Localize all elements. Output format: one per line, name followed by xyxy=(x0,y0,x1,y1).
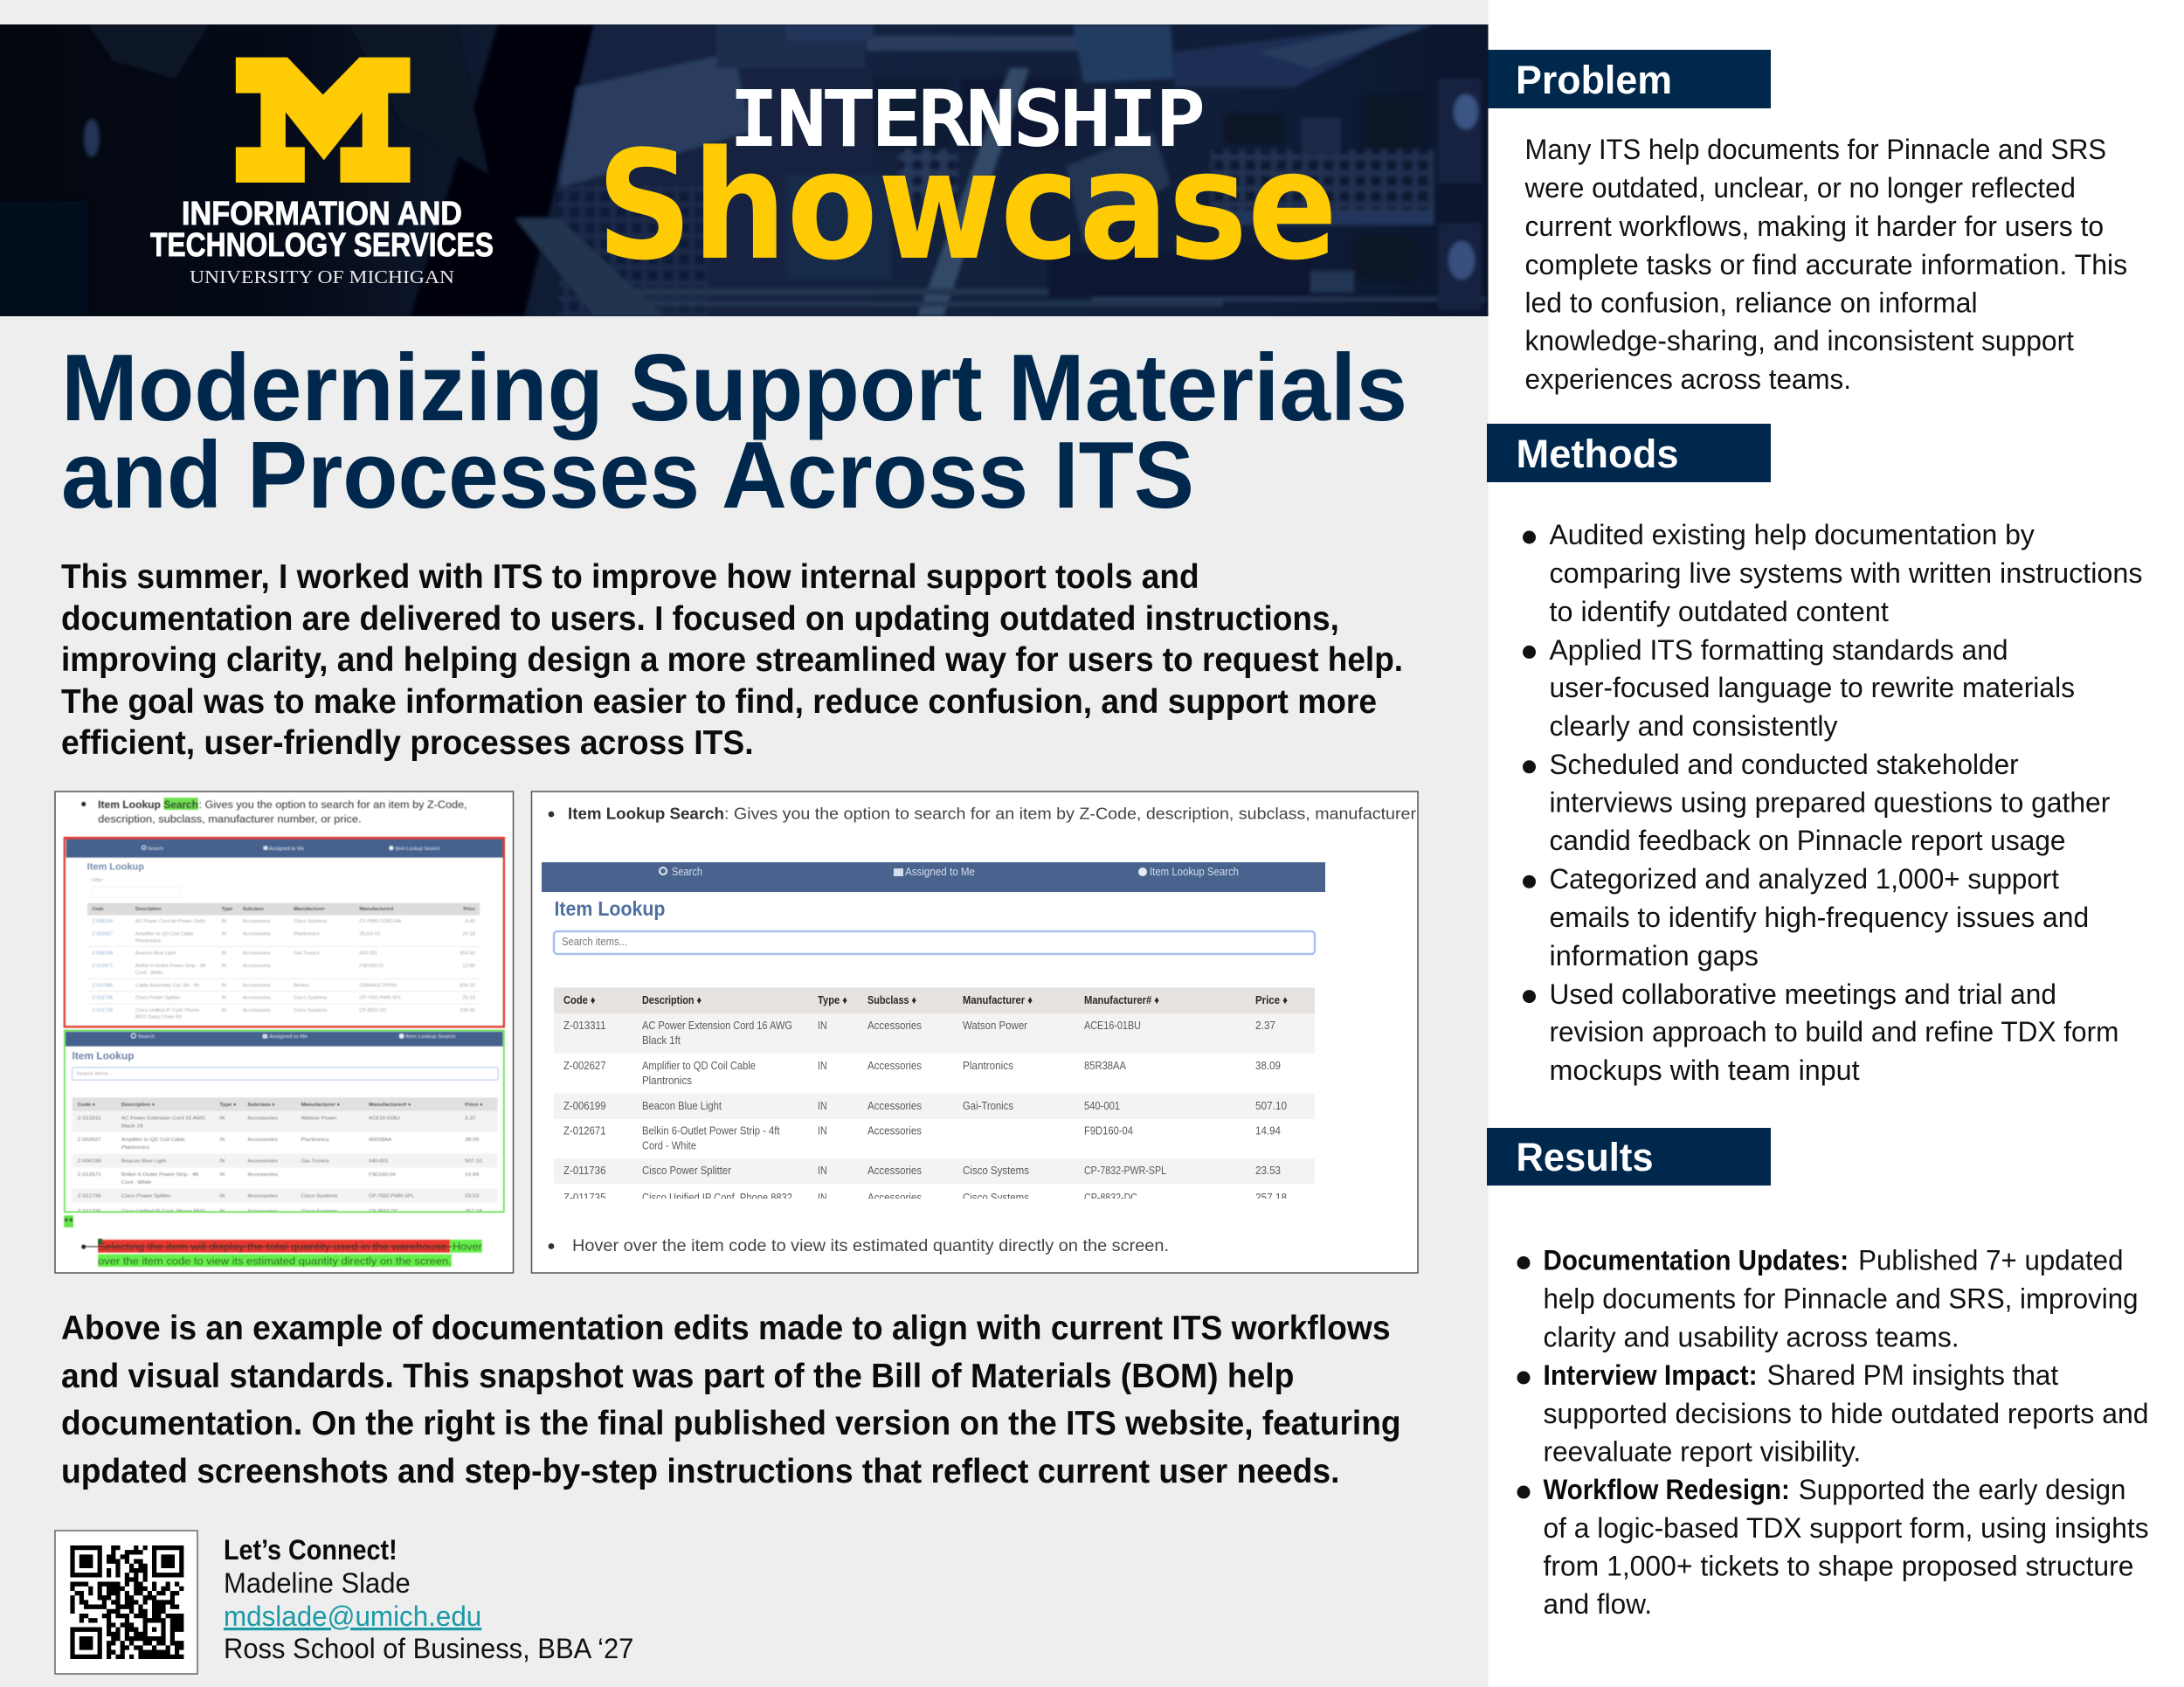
methods list: clearly and consistently xyxy=(1550,710,1837,742)
old table screenshot in red box: IN xyxy=(222,919,226,924)
contact details: Let’s Connect! xyxy=(224,1534,397,1566)
item table: IN xyxy=(818,1059,827,1072)
new table screenshot in green box: IN xyxy=(219,1193,225,1200)
new table screenshot in green box: Search items... xyxy=(76,1072,113,1077)
item table: IN xyxy=(818,1191,827,1204)
new table screenshot in green box: Z-002627 xyxy=(78,1137,101,1143)
results list: Interview Impact: xyxy=(1543,1359,1758,1391)
icon: block M logo xyxy=(236,58,411,183)
results list: Published 7+ updated xyxy=(1858,1245,2123,1276)
old table screenshot in red box: Description xyxy=(135,907,162,912)
title xyxy=(61,335,1407,529)
tracked-change bullet: Hover xyxy=(453,1241,482,1253)
old table screenshot in red box: Z-012671 xyxy=(92,964,113,969)
new table screenshot in green box: Item Lookup xyxy=(72,1049,135,1062)
old table screenshot in red box: AC Power Cord for Power Outle xyxy=(135,919,205,924)
old table screenshot in red box: Cord - White xyxy=(135,971,163,976)
contact details xyxy=(224,1534,633,1664)
item table: Z-011735 xyxy=(563,1191,606,1204)
old table screenshot in red box: Accessories xyxy=(243,1008,271,1013)
contact details: Madeline Slade xyxy=(224,1567,411,1599)
contact details: mdslade@umich.edu xyxy=(224,1601,481,1632)
old table screenshot in red box: Cisco Power Splitter xyxy=(135,996,181,1001)
item table: 507.10 xyxy=(1255,1099,1287,1112)
navigation bar: Search xyxy=(672,865,702,878)
methods list: Categorized and analyzed 1,000+ support xyxy=(1550,863,2059,895)
results list: help documents for Pinnacle and SRS, improving xyxy=(1543,1283,2139,1315)
item table: Cisco Power Splitter xyxy=(642,1164,732,1177)
problem text: experiences across teams. xyxy=(1524,363,1851,395)
caption paragraph xyxy=(61,1310,1401,1490)
new table screenshot in green box: Code ♦ xyxy=(78,1103,95,1108)
old table screenshot in red box: Z-006199 xyxy=(92,951,113,957)
old table screenshot in red box: Subclass xyxy=(243,907,264,912)
item table: IN xyxy=(818,1164,827,1177)
new table screenshot in green box: Cisco Power Splitter xyxy=(121,1193,171,1200)
item table: Accessories xyxy=(867,1099,922,1112)
new table screenshot in green box: Accessories xyxy=(248,1158,278,1165)
old table screenshot in red box: CP-7832-PWR-SPL xyxy=(359,996,401,1001)
item table: Code ♦ xyxy=(563,993,596,1006)
tracked-change bullet: Selecting the item will display the total quantity used in the warehouse. xyxy=(98,1241,450,1253)
results list: reevaluate report visibility. xyxy=(1543,1436,1861,1468)
item table: AC Power Extension Cord 16 AWG xyxy=(642,1019,792,1032)
published intro bullet: Item Lookup Search xyxy=(568,804,724,823)
old table screenshot in red box: Belden xyxy=(294,983,309,988)
results list xyxy=(1517,1245,2149,1620)
new table screenshot in green box: Z-011736 xyxy=(78,1193,101,1200)
search box: Search items... xyxy=(562,935,627,948)
item table xyxy=(542,987,1415,1206)
new table screenshot in green box: IN xyxy=(219,1137,225,1143)
intro paragraph: documentation are delivered to users. I focused on updating outdated instructions, xyxy=(61,600,1339,638)
new table screenshot in green box: IN xyxy=(219,1158,225,1165)
item table: Price ♦ xyxy=(1255,993,1288,1006)
new table screenshot in green box: Accessories xyxy=(248,1193,278,1200)
old table screenshot in red box: Accessories xyxy=(243,996,271,1001)
old table screenshot in red box: Cable Assembly Cat. 6A - 4ft xyxy=(135,983,199,988)
item table: 85R38AA xyxy=(1084,1059,1126,1072)
item table: 14.94 xyxy=(1255,1124,1281,1137)
old table screenshot in red box: Cisco Systems xyxy=(294,919,328,924)
new table screenshot in green box: Beacon Blue Light xyxy=(121,1158,166,1165)
heading: Results: Results xyxy=(1517,1135,1653,1179)
results list: Documentation Updates: xyxy=(1543,1245,1849,1276)
new table screenshot in green box: 540-001 xyxy=(369,1158,389,1165)
old table screenshot in red box: 24.18 xyxy=(462,931,475,937)
methods list: comparing live systems with written instructions xyxy=(1550,557,2143,589)
contact details: Ross School of Business, BBA ‘27 xyxy=(224,1633,633,1664)
old table screenshot in red box: Manufacturer xyxy=(294,907,325,912)
results list: supported decisions to hide outdated reports and xyxy=(1543,1398,2149,1429)
item table: Z-011736 xyxy=(563,1164,606,1177)
old table screenshot in red box: 509.35 xyxy=(460,983,475,988)
logo wordmark xyxy=(150,196,494,287)
heading: Methods xyxy=(1487,424,1771,482)
methods list: Audited existing help documentation by xyxy=(1550,519,2035,550)
results list: from 1,000+ tickets to shape proposed structure xyxy=(1543,1551,2134,1581)
old table screenshot in red box: 540-001 xyxy=(359,951,377,957)
intro paragraph: efficient, user-friendly processes across ITS. xyxy=(61,724,754,762)
item table: F9D160-04 xyxy=(1084,1124,1133,1137)
problem text: led to confusion, reliance on informal xyxy=(1524,287,1978,318)
new table screenshot in green box: F9D160-04 xyxy=(369,1172,397,1178)
results list: and flow. xyxy=(1543,1588,1652,1620)
caption paragraph: and visual standards. This snapshot was part of the Bill of Materials (BOM) help xyxy=(61,1358,1294,1395)
methods list: revision approach to build and refine TDX form xyxy=(1550,1016,2118,1047)
old table screenshot in red box: Manufacturer# xyxy=(359,907,394,912)
problem text: complete tasks or find accurate information. This xyxy=(1524,249,2127,280)
draft intro bullet: Search xyxy=(163,799,198,811)
old table screenshot in red box: Z-017586 xyxy=(92,983,113,988)
old table screenshot in red box: IN xyxy=(222,983,226,988)
problem text: current workflows, making it harder for users to xyxy=(1524,211,2104,242)
item table: 38.09 xyxy=(1255,1059,1281,1072)
item table: Cord - White xyxy=(642,1139,696,1151)
methods list: Applied ITS formatting standards and xyxy=(1550,634,2008,666)
banner title: Showcase: Showcase xyxy=(597,118,1337,294)
results list: Workflow Redesign: xyxy=(1543,1474,1790,1505)
old table screenshot in red box: Cisco Unified IP Conf. Phone xyxy=(135,1008,199,1013)
new table screenshot in green box: 507.10 xyxy=(465,1158,482,1165)
new table screenshot in green box: IN xyxy=(219,1172,225,1178)
methods list: to identify outdated content xyxy=(1550,596,1889,627)
new table screenshot in green box: Watson Power xyxy=(301,1117,337,1122)
methods list: information gaps xyxy=(1550,940,1759,971)
highlighted asterisks: ** xyxy=(65,1215,73,1227)
old table screenshot in red box: Cisco Systems xyxy=(294,1008,328,1013)
item table: Manufacturer# ♦ xyxy=(1084,993,1159,1006)
tracked-change bullet: over the item code to view its estimated quantity directly on the screen. xyxy=(98,1255,452,1267)
new table screenshot in green box: Price ♦ xyxy=(465,1103,483,1108)
item lookup heading: Item Lookup xyxy=(554,897,666,920)
old table screenshot in red box: Accessories xyxy=(243,983,271,988)
old table screenshot in red box: Type xyxy=(222,907,233,912)
item table: Plantronics xyxy=(963,1059,1013,1072)
new table screenshot in green box: Plantronics xyxy=(301,1137,329,1143)
new table screenshot in green box: Manufacturer ♦ xyxy=(301,1103,340,1108)
item table: IN xyxy=(818,1124,827,1137)
item table: Plantronics xyxy=(642,1074,692,1087)
published intro bullet: : Gives you the option to search for an item by Z-Code, description, subclass, manufacturer xyxy=(724,804,1416,823)
item table: Manufacturer ♦ xyxy=(963,993,1033,1006)
new table screenshot in green box: Z-011735 xyxy=(78,1209,101,1214)
item table: IN xyxy=(818,1099,827,1112)
new table screenshot in green box: Cisco Systems xyxy=(301,1209,338,1214)
search box xyxy=(554,931,1315,954)
problem text: were outdated, unclear, or no longer reflected xyxy=(1524,172,2076,204)
item table: Accessories xyxy=(867,1019,922,1032)
new table screenshot in green box: ACE16-01BU xyxy=(369,1117,400,1122)
old table screenshot in red box: Z-011735 xyxy=(92,1008,113,1013)
draft intro bullet: Item Lookup xyxy=(98,799,161,811)
title: and Processes Across ITS xyxy=(61,422,1194,529)
new table screenshot in green box: Description ♦ xyxy=(121,1103,155,1108)
methods list: Scheduled and conducted stakeholder xyxy=(1550,749,2019,780)
new table screenshot in green box: AC Power Extension Cord 16 AWG xyxy=(121,1117,206,1122)
results list: Shared PM insights that xyxy=(1767,1359,2058,1391)
old table screenshot in red box: Assigned to Me xyxy=(269,847,304,852)
new table screenshot in green box: Black 1ft xyxy=(121,1124,143,1130)
old table screenshot in red box: Z-002627 xyxy=(92,931,113,937)
old table screenshot in red box: Item Lookup xyxy=(87,861,144,872)
new table screenshot in green box: Amplifier to QD Coil Cable xyxy=(121,1137,185,1143)
new table screenshot in green box: 14.94 xyxy=(465,1172,480,1178)
item table: Accessories xyxy=(867,1059,922,1072)
item table: 257.18 xyxy=(1255,1191,1287,1204)
problem text xyxy=(1524,134,2127,395)
intro paragraph: The goal was to make information easier to find, reduce confusion, and support more xyxy=(61,683,1377,721)
problem text: knowledge-sharing, and inconsistent support xyxy=(1524,325,2074,356)
old table screenshot in red box: IN xyxy=(222,964,226,969)
panel: marked-up documentation draft xyxy=(55,792,514,1273)
caption paragraph: updated screenshots and step-by-step instructions that reflect current user needs. xyxy=(61,1453,1339,1490)
old table screenshot in red box: CP-PWR-CORD-NA xyxy=(359,919,402,924)
icon: QR code xyxy=(55,1531,197,1674)
item table: Z-002627 xyxy=(563,1059,606,1072)
item table: 540-001 xyxy=(1084,1099,1120,1112)
draft intro bullet: : Gives you the option to search for an item by Z-Code, xyxy=(198,799,467,811)
new table screenshot in green box: Cisco Unified IP Conf. Phone 8832 xyxy=(121,1209,205,1214)
old table screenshot in red box: 4.40 xyxy=(465,919,475,924)
logo wordmark: UNIVERSITY OF MICHIGAN xyxy=(190,266,454,287)
new table screenshot in green box: Cisco Systems xyxy=(301,1193,338,1200)
caption paragraph: Above is an example of documentation edits made to align with current ITS workflows xyxy=(61,1310,1391,1347)
old table screenshot in red box: Accessories xyxy=(243,919,271,924)
old table screenshot in red box: IN xyxy=(222,1008,226,1013)
item table: Z-006199 xyxy=(563,1099,606,1112)
item table: ACE16-01BU xyxy=(1084,1019,1141,1032)
item table: Watson Power xyxy=(963,1019,1028,1032)
old table screenshot in red box: IN xyxy=(222,996,226,1001)
old table screenshot in red box: Code xyxy=(92,907,104,912)
new table screenshot in green box: 257.18 xyxy=(465,1209,482,1214)
item table: 2.37 xyxy=(1255,1019,1275,1032)
item table: Z-012671 xyxy=(563,1124,606,1137)
results list: of a logic-based TDX support form, using insights xyxy=(1543,1512,2149,1544)
item table: Subclass ♦ xyxy=(867,993,916,1006)
old table screenshot in red box: 29.15 xyxy=(462,996,475,1001)
caption paragraph: documentation. On the right is the final published version on the ITS website, featuring xyxy=(61,1405,1401,1442)
old table screenshot in red box: C6N6AUCTPR44 xyxy=(359,983,397,988)
intro paragraph: This summer, I worked with ITS to improve how internal support tools and xyxy=(61,558,1199,596)
old table screenshot in red box: Gai-Tronics xyxy=(294,951,320,957)
new table screenshot in green box: Type ♦ xyxy=(219,1103,236,1108)
title: Modernizing Support Materials xyxy=(61,335,1407,441)
new table screenshot in green box: Subclass ♦ xyxy=(248,1103,275,1108)
methods list: candid feedback on Pinnacle report usage xyxy=(1550,825,2066,856)
intro paragraph xyxy=(61,558,1403,762)
new table screenshot in green box: Assigned to Me xyxy=(269,1034,308,1040)
banner xyxy=(0,24,1489,316)
item table: Amplifier to QD Coil Cable xyxy=(642,1059,756,1072)
logo wordmark: TECHNOLOGY SERVICES xyxy=(150,227,494,264)
new table screenshot in green box: Z-006199 xyxy=(78,1158,101,1165)
new table screenshot in green box: 2.37 xyxy=(465,1117,476,1122)
item table: Type ♦ xyxy=(818,993,847,1006)
new table screenshot in green box: Z-012671 xyxy=(78,1172,101,1178)
item table: Description ♦ xyxy=(642,993,702,1006)
new table screenshot in green box: Gai-Tronics xyxy=(301,1158,329,1165)
tracked-change bullet xyxy=(81,1239,482,1267)
banner background: server rack photo xyxy=(0,24,1485,316)
new table screenshot in green box: CP-8832-DC xyxy=(369,1209,398,1214)
item table: CP-7832-PWR-SPL xyxy=(1084,1164,1166,1177)
draft intro bullet: description, subclass, manufacturer number, or price. xyxy=(98,812,362,825)
old table screenshot in red box: F9D160-01 xyxy=(359,964,384,969)
new table screenshot in green box: Search xyxy=(138,1034,155,1040)
old table screenshot in red box xyxy=(65,838,504,1027)
draft intro bullet xyxy=(81,798,467,825)
old table screenshot in red box: Plantronics xyxy=(294,931,320,937)
results list: Supported the early design xyxy=(1799,1474,2125,1505)
new table screenshot in green box: Accessories xyxy=(248,1209,278,1214)
results list: clarity and usability across teams. xyxy=(1543,1322,1959,1353)
new table screenshot in green box: Z-013311 xyxy=(78,1117,101,1122)
hover note bullet: Hover over the item code to view its estimated quantity directly on the screen. xyxy=(572,1237,1169,1255)
heading: Methods: Methods xyxy=(1517,432,1679,476)
item table: Z-013311 xyxy=(563,1019,606,1032)
old table screenshot in red box: CP-8832-DC xyxy=(359,1008,387,1013)
old table screenshot in red box: Search xyxy=(148,847,163,852)
item table: IN xyxy=(818,1019,827,1032)
old table screenshot in red box: Accessories xyxy=(243,964,271,969)
new table screenshot in green box xyxy=(65,1031,504,1214)
new table screenshot in green box: Manufacturer# ♦ xyxy=(369,1103,411,1108)
old table screenshot in red box: Amplifier to QD Coil Cable xyxy=(135,931,193,937)
new table screenshot in green box: Accessories xyxy=(248,1117,278,1122)
new table screenshot in green box: Cord - White xyxy=(121,1180,151,1186)
new table screenshot in green box: IN xyxy=(219,1117,225,1122)
old table screenshot in red box: Plantronics xyxy=(135,939,161,944)
intro paragraph: improving clarity, and helping design a more streamlined way for users to request help. xyxy=(61,641,1403,679)
old table screenshot in red box: Item Lookup Search xyxy=(395,847,440,852)
heading: Problem xyxy=(1489,50,1771,108)
new table screenshot in green box: 38.09 xyxy=(465,1137,479,1143)
item table: Belkin 6-Outlet Power Strip - 4ft xyxy=(642,1124,780,1137)
item table: Accessories xyxy=(867,1124,922,1137)
item table: Accessories xyxy=(867,1191,922,1204)
new table screenshot in green box: 23.53 xyxy=(465,1193,479,1200)
item table: Black 1ft xyxy=(642,1034,681,1047)
old table screenshot in red box: IN xyxy=(222,931,226,937)
navigation bar xyxy=(542,862,1325,892)
navigation bar: Assigned to Me xyxy=(905,865,975,878)
banner title: Internship: INTERNSHIP xyxy=(730,76,1204,162)
old table screenshot in red box: IN xyxy=(222,951,226,957)
methods list xyxy=(1523,519,2143,1086)
item table: Accessories xyxy=(867,1164,922,1177)
navigation bar: Item Lookup Search xyxy=(1150,865,1239,878)
new table screenshot in green box: Belkin 6-Outlet Power Strip - 4ft xyxy=(121,1172,199,1178)
methods list: Used collaborative meetings and trial and xyxy=(1550,978,2056,1010)
item table: Cisco Systems xyxy=(963,1164,1029,1177)
item table: Gai-Tronics xyxy=(963,1099,1013,1112)
item table: Beacon Blue Light xyxy=(642,1099,722,1112)
problem text: Many ITS help documents for Pinnacle and SRS xyxy=(1524,134,2106,165)
new table screenshot in green box: CP-7832-PWR-SPL xyxy=(369,1193,415,1200)
item table: Cisco Systems xyxy=(963,1191,1029,1204)
old table screenshot in red box: Accessories xyxy=(243,951,271,957)
methods list: user-focused language to rewrite materials xyxy=(1550,672,2075,703)
old table screenshot in red box: 238.95 xyxy=(460,1008,475,1013)
panel: final published documentation xyxy=(531,792,1418,1273)
old table screenshot in red box: Beacon Blue Light xyxy=(135,951,176,957)
old table screenshot in red box: Z-005140 xyxy=(92,919,113,924)
old table screenshot in red box: 454.50 xyxy=(460,951,475,957)
new table screenshot in green box: Accessories xyxy=(248,1137,278,1143)
item table: Cisco Unified IP Conf. Phone 8832 xyxy=(642,1191,792,1204)
old table screenshot in red box: Filter xyxy=(92,878,103,883)
new table screenshot in green box: Accessories xyxy=(248,1172,278,1178)
old table screenshot in red box: 13.88 xyxy=(462,964,475,969)
logo wordmark: INFORMATION AND xyxy=(182,196,462,232)
old table screenshot in red box: Cisco Systems xyxy=(294,996,328,1001)
methods list: interviews using prepared questions to gather xyxy=(1550,787,2111,818)
new table screenshot in green box: Item Lookup Search xyxy=(405,1034,455,1040)
heading: Results xyxy=(1487,1128,1771,1186)
new table screenshot in green box: Plantronics xyxy=(121,1145,149,1151)
item table: 23.53 xyxy=(1255,1164,1281,1177)
new table screenshot in green box: 85R38AA xyxy=(369,1137,391,1143)
methods list: emails to identify high-frequency issues and xyxy=(1550,902,2089,933)
old table screenshot in red box: Z-011736 xyxy=(92,996,113,1001)
old table screenshot in red box: Belkin 6-Outlet Power Strip - 4ft xyxy=(135,964,206,969)
old table screenshot in red box: 8832 Daisy Chain Kit xyxy=(135,1015,182,1020)
methods list: mockups with team input xyxy=(1550,1054,1860,1086)
old table screenshot in red box: 26J16-01 xyxy=(359,931,381,937)
old table screenshot in red box: Accessories xyxy=(243,931,271,937)
heading: Problem: Problem xyxy=(1516,58,1672,102)
item table: CP-8832-DC xyxy=(1084,1191,1137,1204)
old table screenshot in red box: Price xyxy=(463,907,476,912)
new table screenshot in green box: IN xyxy=(219,1209,225,1214)
